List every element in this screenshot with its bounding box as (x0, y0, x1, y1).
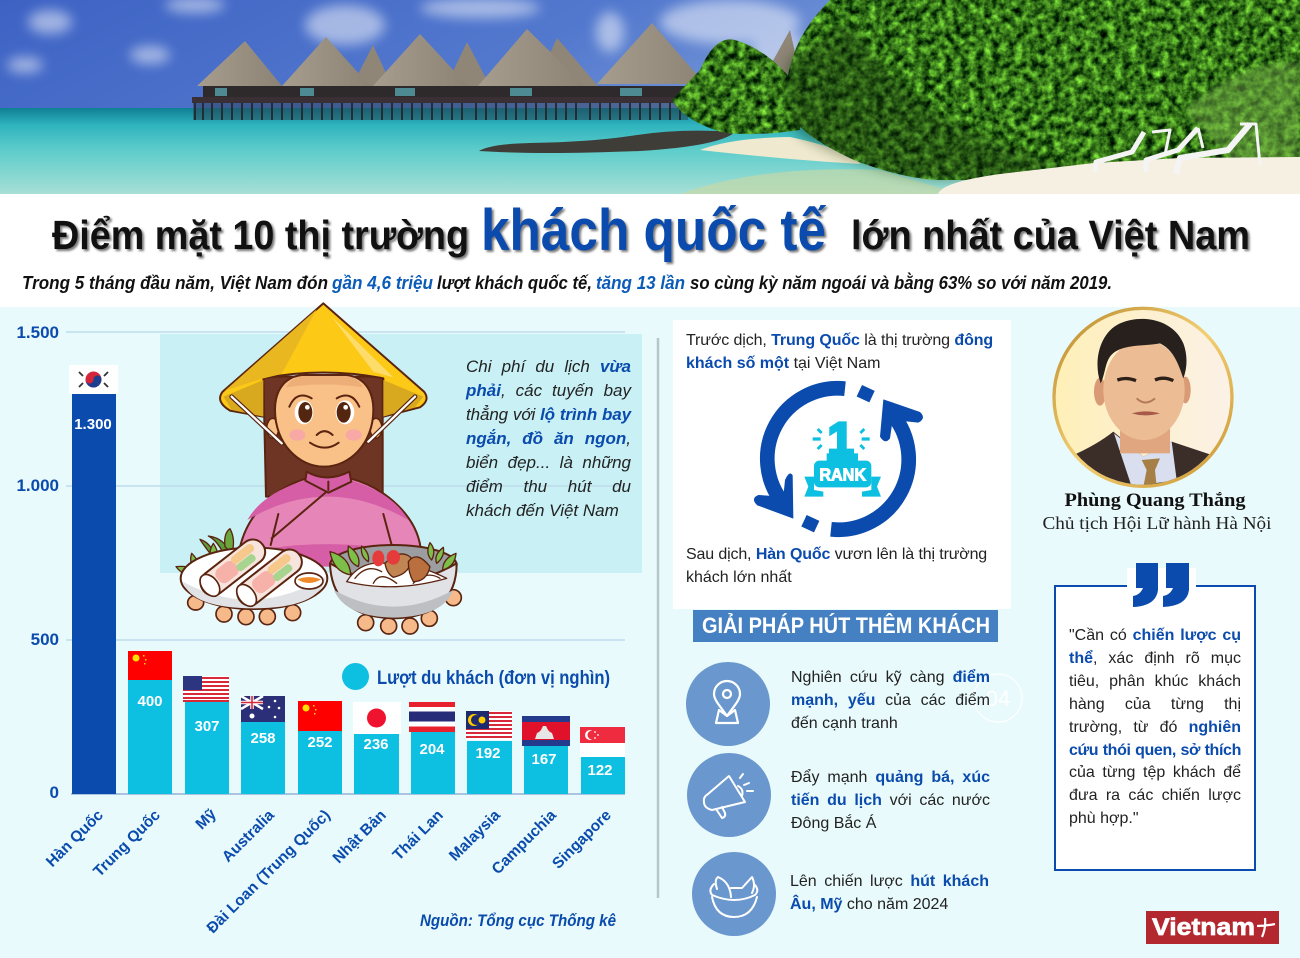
text: why tourists come (466, 357, 632, 520)
bar values: 167 (531, 751, 557, 768)
bar values: 258 (250, 730, 276, 747)
bar values: 307 (194, 718, 220, 735)
sand (938, 157, 1300, 194)
text: before pandemic: khách số một tại Việt Nam (686, 355, 880, 372)
sand spit (700, 137, 860, 164)
bar values: 1.300 (74, 416, 112, 433)
text: why tourists come: khách đến Việt Nam (466, 501, 619, 520)
text: solution 3 (790, 873, 989, 913)
flag: USA (183, 676, 229, 702)
text: why tourists come: biển đẹp... là những (466, 453, 631, 472)
person name and title (1042, 490, 1272, 533)
icon: map pin in circle (686, 662, 770, 746)
person name and title: Chủ tịch Hội Lữ hành Hà Nội (1042, 513, 1272, 533)
flag: Australia (241, 696, 285, 722)
hero photo: beach resort with overwater huts (0, 0, 1300, 194)
text: before pandemic: Trước dịch, Trung Quốc là thị trường đông (686, 332, 993, 349)
light blue panel behind character (160, 334, 642, 573)
icon: megaphone in circle (687, 753, 771, 837)
text: solution 2: Đông Bắc Á (791, 815, 876, 832)
flag: Japan (353, 702, 401, 734)
portrait: Phùng Quang Thắng (1052, 307, 1234, 493)
text: after pandemic: Sau dịch, Hàn Quốc vươn lên là thị trường (686, 546, 987, 563)
subtitle: lượt khách quốc tế, (437, 273, 592, 293)
text: expert quote: tiêu, phân khúc khách (1069, 673, 1241, 690)
text: expert quote: thể, xác định rõ mục (1069, 650, 1241, 667)
text: why tourists come: điểm thu hút du (466, 477, 631, 496)
text: why tourists come: phải, các tuyến bay (466, 381, 631, 400)
title: lớn nhất của Việt Nam (851, 212, 1250, 258)
flag: Singapore (580, 727, 625, 757)
category labels: Singapore (549, 807, 615, 872)
text: solution 1: đến cạnh tranh (791, 715, 898, 732)
rank badge: 1 (828, 413, 854, 465)
subtitle: tăng 13 lần (596, 273, 685, 293)
text: expert quote: hàng của từng thị (1069, 696, 1241, 713)
heading bar: solutions: GIẢI PHÁP HÚT THÊM KHÁCH (702, 613, 990, 638)
flag: Cambodia (522, 716, 570, 746)
flag: South Korea (69, 365, 118, 394)
title: khách quốc tế (481, 198, 827, 263)
y axis labels: 1.000 (16, 476, 59, 495)
flag: Thailand (409, 702, 455, 732)
spring rolls (196, 535, 307, 610)
text: why tourists come: thẳng với lộ trình bay (466, 405, 631, 424)
category labels: Mỹ (193, 806, 220, 833)
text: after pandemic (686, 546, 987, 586)
text: expert quote: trường, từ đó nghiên (1069, 719, 1241, 736)
forest (786, 0, 1300, 180)
text: expert quote: đưa ra các chiến lược (1069, 787, 1241, 804)
rank badge (804, 413, 881, 497)
y axis labels: 1.500 (16, 323, 59, 342)
category labels: Campuchia (489, 807, 560, 878)
category labels: Nhật Bản (330, 807, 390, 867)
icon: closing quotation marks (1133, 563, 1189, 607)
face (275, 375, 373, 467)
illustration: girl in conical hat with spring rolls and pho (176, 303, 461, 634)
hat (220, 303, 427, 417)
text: solution 3: Lên chiến lược hút khách (790, 873, 989, 890)
text: expert quote: cứu thói quen, sở thích (1069, 742, 1241, 759)
bar values: 122 (587, 762, 613, 779)
text: after pandemic: khách lớn nhất (686, 569, 792, 586)
y axis labels: 500 (31, 630, 59, 649)
bar values: 236 (363, 736, 389, 753)
text: solution 2 (791, 769, 990, 832)
text: expert quote: "Cần có chiến lược cụ (1069, 627, 1241, 644)
rocks (479, 131, 735, 153)
ears (267, 418, 279, 438)
text: expert quote: phù hợp." (1069, 810, 1139, 827)
text: solution 2: tiến du lịch với các nước (791, 792, 990, 809)
rank badge: RANK (819, 465, 866, 485)
text: solution 2: Đẩy mạnh quảng bá, xúc (791, 769, 990, 786)
bar values: 252 (307, 734, 333, 751)
subtitle (22, 272, 1112, 293)
text: solution 3: Âu, Mỹ cho năm 2024 (790, 896, 948, 913)
bars (72, 394, 625, 794)
logo: Vietnam+ (1146, 911, 1279, 944)
flag: China (128, 651, 172, 680)
bar values: 204 (419, 741, 445, 758)
text: expert quote (1069, 627, 1241, 827)
bowl of pho (330, 543, 457, 618)
quote box (1055, 563, 1255, 870)
icon: rank one with circular arrows (754, 385, 923, 532)
bar chart: international visitors by market (16, 323, 625, 937)
category labels: Thái Lan (390, 807, 447, 864)
herb leaves left (176, 529, 233, 577)
content background (0, 307, 1300, 958)
plate (181, 548, 327, 609)
text: solution 1: Nghiên cứu kỹ càng điểm (791, 669, 990, 686)
subtitle: so cùng kỳ năm ngoái và bằng 63% so với năm 2019. (690, 272, 1112, 293)
bar values (74, 416, 613, 779)
bar values: 400 (137, 693, 163, 710)
text: expert quote: của từng tệp khách để (1069, 764, 1241, 781)
chairs (1095, 124, 1260, 174)
title (52, 198, 1250, 263)
source note: Nguồn: Tổng cục Thống kê (420, 912, 616, 930)
body (238, 472, 421, 567)
text: solution 1: mạnh, yếu của các điểm (791, 692, 990, 709)
text: before pandemic (686, 332, 993, 372)
logo: Vietnam+: Vietnam (1152, 914, 1255, 941)
y axis labels: 0 (50, 783, 59, 802)
panel: before and after pandemic (673, 320, 1011, 609)
bar values: 192 (475, 745, 501, 762)
category labels: Đài Loan (Trung Quốc) (204, 807, 334, 937)
divider (657, 338, 659, 898)
hair (263, 377, 383, 497)
category labels: Australia (219, 807, 278, 866)
text: solution 1 (791, 669, 990, 732)
category labels (43, 806, 615, 937)
person name and title: Phùng Quang Thắng (1064, 490, 1246, 511)
legend: Lượt du khách (đơn vị nghìn) (377, 668, 610, 689)
faint watermark circle (974, 674, 1022, 722)
subtitle: gần 4,6 triệu (331, 273, 433, 293)
text: why tourists come: Chi phí du lịch vừa (466, 357, 631, 376)
huts (192, 23, 800, 120)
straps (232, 397, 415, 443)
subtitle: Trong 5 tháng đầu năm, Việt Nam đón (22, 273, 328, 293)
flag: Malaysia (466, 711, 512, 740)
category labels: Hàn Quốc (43, 807, 107, 871)
legend (342, 663, 610, 690)
category labels: Malaysia (446, 807, 504, 865)
title: Điểm mặt 10 thị trường (52, 212, 469, 258)
flag: China (Taiwan market) (298, 701, 342, 731)
category labels: Trung Quốc (90, 807, 164, 880)
text: why tourists come: ngắn, đồ ăn ngon, (466, 429, 631, 448)
icon: bowl in circle (692, 852, 776, 936)
fingers (188, 590, 461, 634)
y axis labels (16, 323, 59, 802)
faint watermark circle: 04 (986, 686, 1010, 711)
small tree (672, 39, 800, 134)
circular arrows (754, 385, 923, 532)
